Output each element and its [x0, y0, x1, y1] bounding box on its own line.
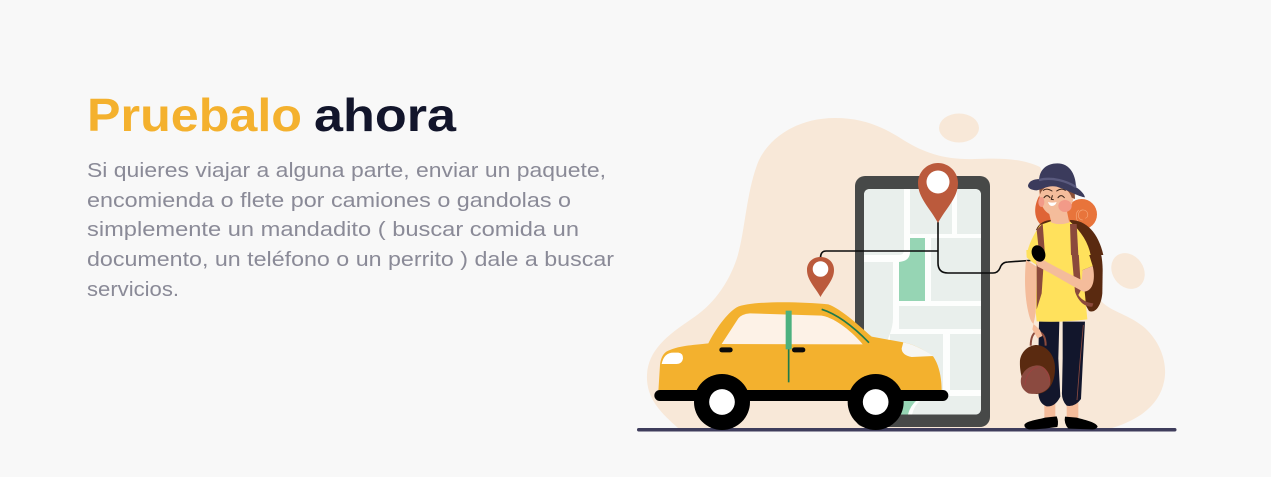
backpack top — [1070, 220, 1103, 255]
map screen — [864, 189, 981, 414]
bag handle — [1031, 332, 1046, 346]
roof trim — [822, 309, 869, 343]
cheek left — [1038, 197, 1044, 207]
body text: documento, un teléfono o un perrito ) dale a buscar — [87, 248, 614, 271]
left strap top — [1037, 223, 1045, 255]
illustration — [637, 114, 1176, 432]
door handle left — [719, 347, 733, 352]
face — [1039, 185, 1074, 216]
upper body — [1025, 230, 1103, 338]
right trouser leg — [1062, 322, 1085, 406]
shirt upper — [1027, 221, 1091, 255]
large location pin — [918, 163, 958, 223]
car underbody — [654, 390, 948, 401]
right arm — [1036, 260, 1094, 292]
rear light — [662, 353, 683, 364]
backpack — [1075, 230, 1103, 311]
right shoe — [1065, 417, 1098, 429]
car window — [722, 313, 863, 344]
backpack top left — [1036, 220, 1052, 230]
legs and bag — [1020, 322, 1098, 429]
door pillar — [786, 311, 792, 349]
body text — [87, 159, 614, 301]
hat dome — [1039, 163, 1076, 190]
title: Pruebalo — [87, 89, 302, 141]
car body — [658, 302, 942, 392]
ankles — [1044, 402, 1078, 420]
shirt lower — [1026, 250, 1093, 322]
route lines — [820, 222, 1036, 273]
park block bottom — [900, 400, 917, 414]
body text: Si quieres viajar a alguna parte, enviar un paquete, — [87, 159, 606, 182]
small blob top — [939, 114, 979, 142]
traveller — [1020, 163, 1103, 429]
phone with map — [855, 176, 990, 427]
right strap — [1071, 247, 1093, 307]
hat brim — [1028, 179, 1085, 197]
hat ribbon — [1039, 179, 1076, 187]
head hair — [1039, 183, 1075, 199]
hair — [1035, 196, 1053, 224]
head and shoulders — [1027, 163, 1103, 255]
smile — [1048, 202, 1057, 206]
body text: servicios. — [87, 278, 179, 301]
bedroll — [1066, 199, 1097, 230]
neck — [1048, 210, 1069, 224]
phone body — [855, 176, 990, 427]
body text: simplemente un mandadito ( buscar comida un — [87, 218, 579, 241]
door line — [788, 348, 789, 382]
hand bag — [1020, 345, 1055, 394]
rear wheel — [694, 374, 750, 430]
trouser side stripe — [1077, 325, 1083, 400]
left shoe — [1024, 416, 1058, 429]
small location pin — [807, 257, 834, 297]
cheek right — [1058, 200, 1072, 212]
taxi car — [654, 302, 948, 430]
left trouser leg — [1038, 322, 1060, 406]
title: ahora — [314, 89, 456, 141]
handheld phone — [1029, 243, 1048, 264]
right strap top — [1070, 224, 1078, 255]
front light — [902, 342, 933, 357]
door handle right — [792, 347, 805, 352]
ground line — [637, 428, 1176, 432]
eyes and brows — [1043, 189, 1065, 200]
park block — [899, 238, 925, 301]
body text: encomienda o flete por camiones o gandolas o — [87, 189, 571, 212]
title — [87, 89, 456, 141]
left strap — [1037, 247, 1043, 309]
map blocks — [864, 189, 981, 414]
small blob right — [1104, 247, 1152, 295]
background blob — [647, 118, 1165, 428]
left arm — [1025, 260, 1042, 338]
front wheel — [848, 374, 904, 430]
